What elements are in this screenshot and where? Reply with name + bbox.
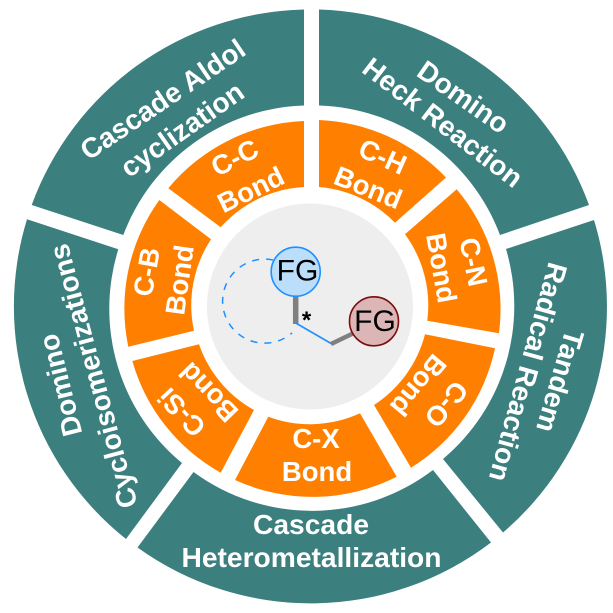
panel: Cascade Heterometallization <box>138 470 491 603</box>
functional group: red FG: FG <box>354 305 396 338</box>
segment: C-X Bond: C-X <box>292 423 340 454</box>
panel: Domino Cycloisomerizations: Cycloisomerizations <box>43 241 144 512</box>
segment: C-B Bond: Bond <box>159 243 200 317</box>
segment: C-H Bond: C-H <box>354 132 411 181</box>
panel: Tandem Radical Reaction: Tandem <box>530 326 590 436</box>
segment: C-O Bond: C-O <box>418 375 474 434</box>
bonds <box>296 296 356 344</box>
segment: C-O Bond <box>374 334 495 468</box>
segment: C-Si Bond <box>132 344 254 473</box>
functional group: blue FG <box>271 247 320 296</box>
panel: Domino Heck Reaction: Domino <box>412 55 515 140</box>
segment: C-H Bond: Bond <box>330 160 407 215</box>
functional group: blue FG: FG <box>277 254 318 288</box>
panel: Domino Heck Reaction: Heck Reaction <box>357 52 529 194</box>
segment: C-N Bond: C-N <box>453 235 494 289</box>
segment: C-B Bond <box>124 200 211 347</box>
segment: C-B Bond: C-B <box>127 245 166 299</box>
segment: C-H Bond <box>319 120 446 223</box>
stereocentre asterisk: * <box>302 307 312 334</box>
panel: Domino Cycloisomerizations: Domino <box>33 331 88 439</box>
panel: Cascade Heterometallization: Cascade <box>253 509 369 540</box>
segment: C-N Bond <box>405 189 501 333</box>
segment: C-Si Bond: C-Si <box>152 382 212 443</box>
segment: C-C Bond <box>168 121 304 227</box>
segment: C-O Bond: Bond <box>384 348 453 422</box>
segment: C-Si Bond: Bond <box>173 356 244 428</box>
segment: C-X Bond: Bond <box>282 456 352 487</box>
segment: C-N Bond: Bond <box>420 231 463 305</box>
panel: Cascade Aldol cyclization: Cascade Aldol <box>74 33 251 166</box>
center hub: molecule <box>207 204 413 410</box>
panel: Tandem Radical Reaction <box>443 220 607 532</box>
panel: Cascade Aldol cyclization: cyclization <box>115 76 250 183</box>
panel: Tandem Radical Reaction: Radical Reaction <box>483 259 573 485</box>
segment: C-X Bond <box>235 413 397 497</box>
panel: Cascade Heterometallization: Heterometallization <box>182 542 442 573</box>
panel: Domino Cycloisomerizations <box>14 219 182 539</box>
functional group: red FG <box>350 297 398 346</box>
segment: C-C Bond: Bond <box>212 160 289 219</box>
dashed ring <box>223 259 292 343</box>
segment: C-C Bond: C-C <box>206 133 264 182</box>
panel: Domino Heck Reaction <box>319 10 589 235</box>
panel: Cascade Aldol cyclization <box>32 10 304 235</box>
